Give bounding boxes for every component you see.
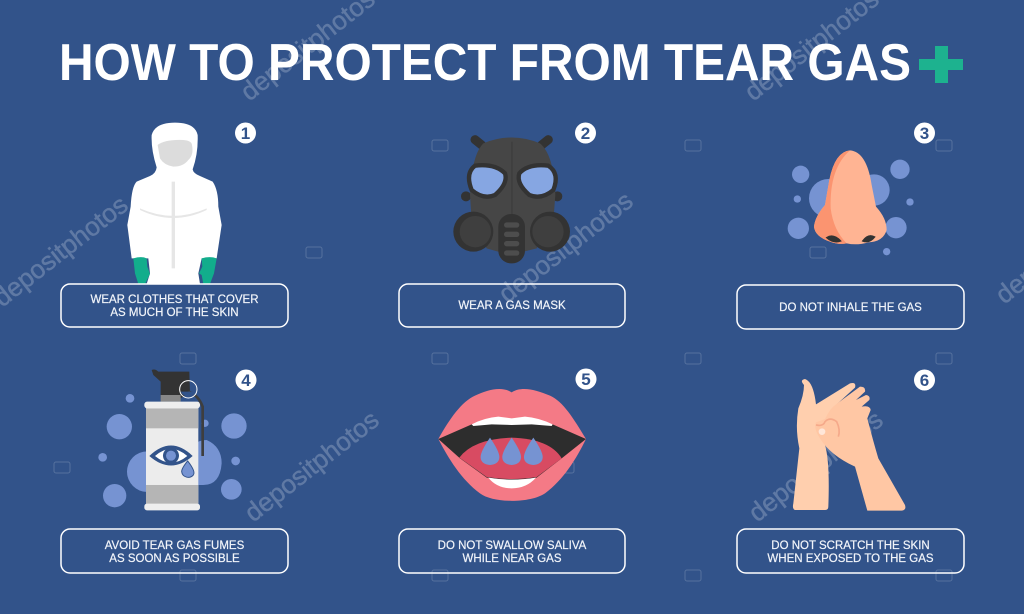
icon: tear gas canister [98, 369, 247, 510]
title: HOW TO PROTECT FROM TEAR GAS [59, 34, 911, 92]
label box 1: AS MUCH OF THE SKIN [110, 307, 239, 319]
badge 5 [576, 368, 596, 390]
label box 6: DO NOT SCRATCH THE SKIN [771, 540, 930, 552]
badge 5: 5 [581, 370, 591, 389]
label box 3 [737, 285, 964, 329]
badge 6 [914, 370, 935, 390]
badge 2 [575, 122, 596, 144]
label box 2 [399, 284, 625, 327]
watermarks: depositphotos [238, 404, 384, 528]
icon: hands scratching skin [793, 379, 905, 511]
label box 5: DO NOT SWALLOW SALIVA [438, 540, 587, 552]
label box 1: WEAR CLOTHES THAT COVER [90, 294, 259, 306]
icon: gas mask [453, 137, 570, 263]
badge 4: 4 [241, 371, 251, 390]
label box 6 [737, 529, 964, 573]
label box 4: AS SOON AS POSSIBLE [109, 553, 240, 565]
icon: green cross [919, 46, 963, 83]
label box 3: DO NOT INHALE THE GAS [779, 302, 922, 314]
label box 5: WHILE NEAR GAS [462, 553, 562, 565]
label box 5 [399, 529, 625, 573]
label box 1 [61, 284, 288, 327]
label box 2: WEAR A GAS MASK [458, 300, 566, 312]
icon: nose with gas bubbles [788, 150, 914, 255]
watermark camera marks [54, 140, 952, 581]
badge 3: 3 [920, 124, 929, 143]
badge 6: 6 [920, 371, 929, 390]
icon: open mouth with saliva drops [438, 389, 586, 501]
badge 2: 2 [581, 124, 590, 143]
watermarks: depositphotos [742, 404, 888, 528]
label box 6: WHEN EXPOSED TO THE GAS [767, 553, 934, 565]
badge 4 [236, 370, 256, 390]
icon: protective suit [127, 123, 222, 284]
label box 4 [61, 529, 288, 573]
badge 3 [914, 122, 935, 144]
watermarks: depositphotos [492, 185, 638, 309]
badge 1: 1 [241, 124, 250, 143]
label box 4: AVOID TEAR GAS FUMES [105, 540, 245, 552]
badge 1 [235, 122, 256, 144]
